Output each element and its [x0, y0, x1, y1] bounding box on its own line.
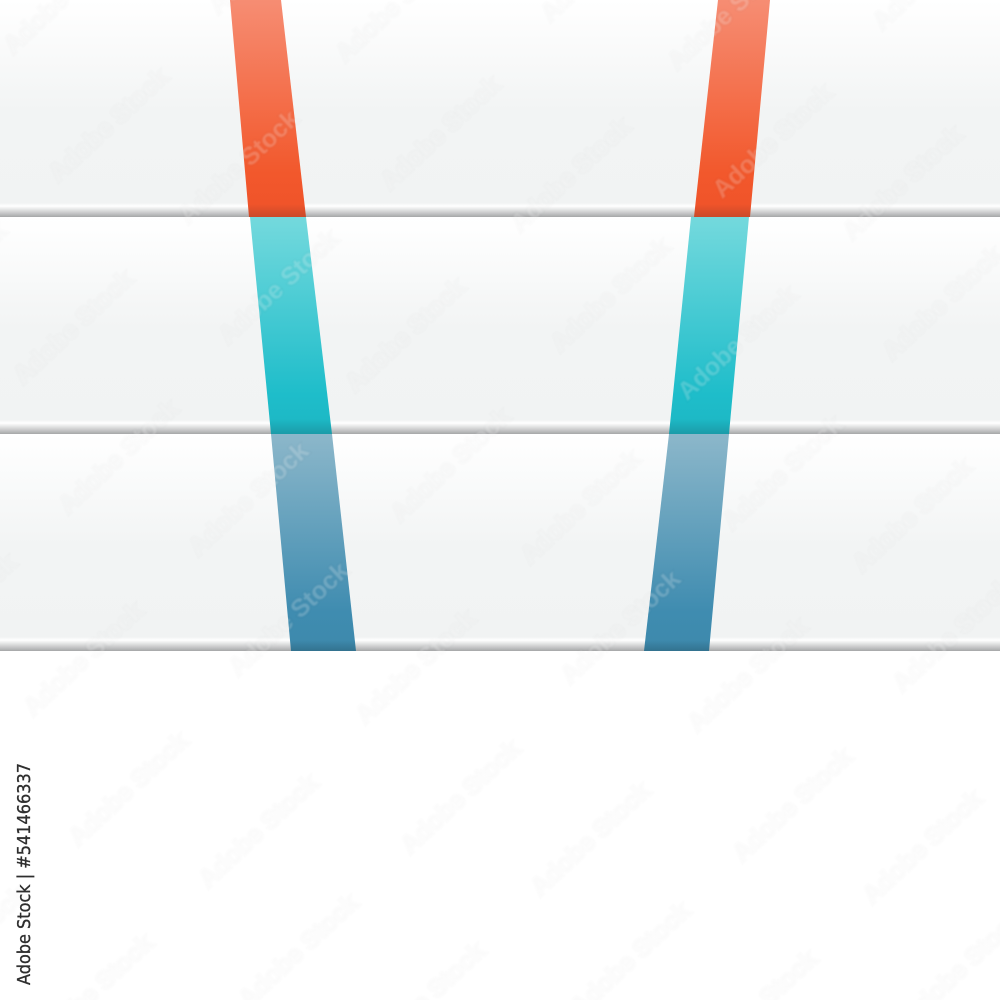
- watermark pattern: Adobe Stock: [395, 735, 526, 859]
- watermark pattern: Adobe Stock: [63, 727, 194, 851]
- watermark pattern: Adobe Stock: [555, 565, 686, 689]
- watermark pattern: Adobe Stock: [213, 225, 344, 349]
- right ribbon: orange segment: [694, 0, 770, 217]
- watermark pattern: Adobe Stock: [173, 105, 304, 229]
- left ribbon: orange segment: [230, 0, 306, 217]
- watermark pattern: Adobe Stock: [53, 395, 184, 519]
- watermark pattern: Adobe Stock: [18, 597, 149, 721]
- watermark pattern: [88, 0, 946, 651]
- watermark pattern: Adobe Stock: [545, 233, 676, 357]
- left ribbon: teal segment: [250, 217, 332, 434]
- watermark pattern: Adobe Stock: [837, 121, 968, 245]
- watermark pattern: Adobe Stock: [717, 411, 848, 535]
- watermark pattern: Adobe Stock: [183, 437, 314, 561]
- watermark pattern: Adobe Stock: [525, 777, 656, 901]
- watermark pattern: Adobe Stock: [515, 445, 646, 569]
- watermark pattern: Adobe Stock: [8, 265, 139, 389]
- watermark pattern: Adobe Stock: [340, 273, 471, 397]
- watermark pattern: Adobe Stock: [505, 113, 636, 237]
- panel: three stacked horizontal bands: [0, 0, 1000, 651]
- watermark pattern: Adobe Stock: [847, 453, 978, 577]
- watermark pattern: Adobe Stock: [682, 613, 813, 737]
- watermark pattern: Adobe Stock: [857, 785, 988, 909]
- right ribbon: teal segment: [669, 217, 749, 434]
- watermark pattern: Adobe Stock: [375, 71, 506, 195]
- right ribbon: [644, 0, 770, 651]
- right ribbon: blue segment: [644, 434, 729, 651]
- panel: bottom band: [0, 434, 1000, 651]
- stock image credit: Adobe Stock | #541466337: [14, 763, 35, 985]
- watermark pattern: Adobe Stock: [223, 557, 354, 681]
- panel: top band: [0, 0, 1000, 217]
- watermark pattern: Adobe Stock: [350, 605, 481, 729]
- panel: middle band: [0, 217, 1000, 434]
- watermark pattern: Adobe Stock: [193, 769, 324, 893]
- left ribbon: [230, 0, 356, 651]
- left ribbon: blue segment: [271, 434, 356, 651]
- watermark pattern: Adobe Stock: [672, 281, 803, 405]
- watermark pattern: Adobe Stock: [385, 403, 516, 527]
- watermark pattern: Adobe Stock: [43, 63, 174, 187]
- watermark pattern: Adobe Stock: [707, 79, 838, 203]
- watermark pattern: Adobe Stock: [727, 743, 858, 867]
